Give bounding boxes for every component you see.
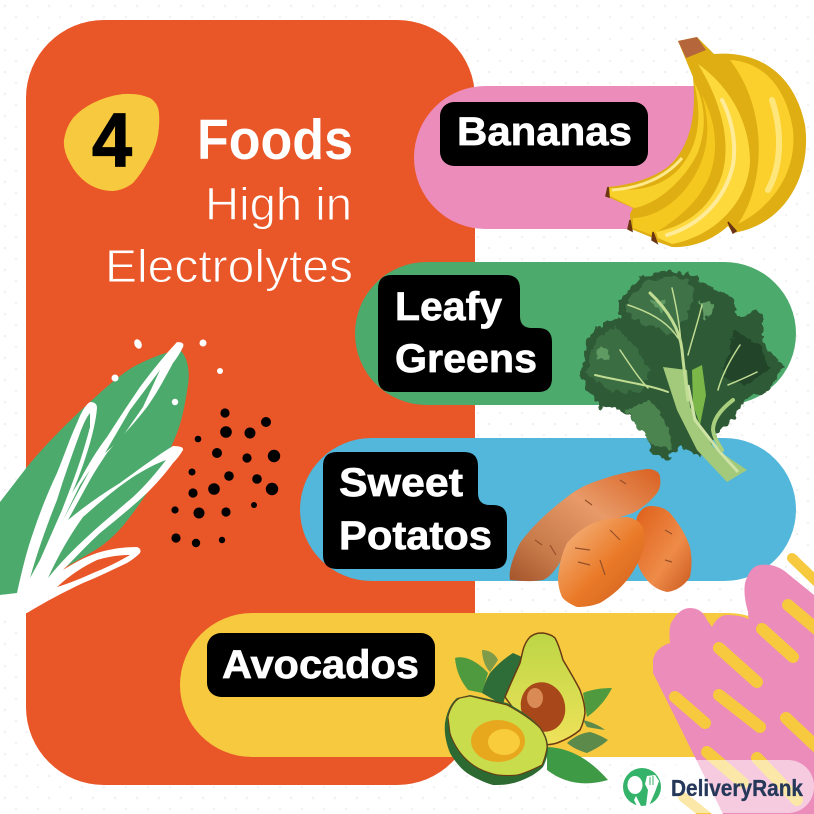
logo backing bbox=[622, 760, 814, 813]
label: Sweet Potatos: Sweet bbox=[339, 461, 463, 505]
logo mark bbox=[623, 768, 661, 806]
label: Sweet Potatos bbox=[323, 452, 507, 569]
panel: orange background bbox=[26, 20, 475, 785]
label: Bananas: Bananas bbox=[457, 110, 632, 154]
label: Leafy Greens bbox=[378, 275, 552, 392]
title: Electrolytes bbox=[105, 240, 353, 292]
icon: kale bbox=[580, 270, 783, 482]
decoration: pink brush blob bbox=[653, 558, 814, 814]
icon: avocados bbox=[445, 633, 612, 785]
label: Sweet Potatos: Potatos bbox=[339, 514, 492, 558]
label: Leafy Greens: Leafy bbox=[395, 285, 503, 329]
pill: sweet potatos bbox=[300, 438, 796, 581]
label: Leafy Greens: Greens bbox=[395, 337, 537, 381]
logo: DeliveryRank bbox=[622, 760, 814, 813]
icon: sweet potatos bbox=[510, 469, 692, 607]
title: Foods bbox=[197, 108, 353, 172]
decoration: green leaf with white strokes bbox=[0, 338, 223, 613]
badge: number 4: 4 bbox=[92, 98, 132, 183]
title: High in bbox=[205, 178, 352, 230]
label: Avocados: Avocados bbox=[222, 643, 419, 687]
title bbox=[105, 108, 353, 292]
decoration: black dots bbox=[171, 408, 280, 547]
label: Bananas bbox=[440, 102, 648, 166]
badge: number 4 bbox=[64, 94, 159, 191]
label: Avocados bbox=[207, 633, 435, 697]
pill: bananas bbox=[414, 86, 700, 229]
logo: DeliveryRank: DeliveryRank bbox=[671, 775, 803, 801]
pill: leafy greens bbox=[355, 262, 796, 405]
pill: avocados bbox=[180, 613, 800, 757]
icon: bananas bbox=[606, 37, 806, 247]
